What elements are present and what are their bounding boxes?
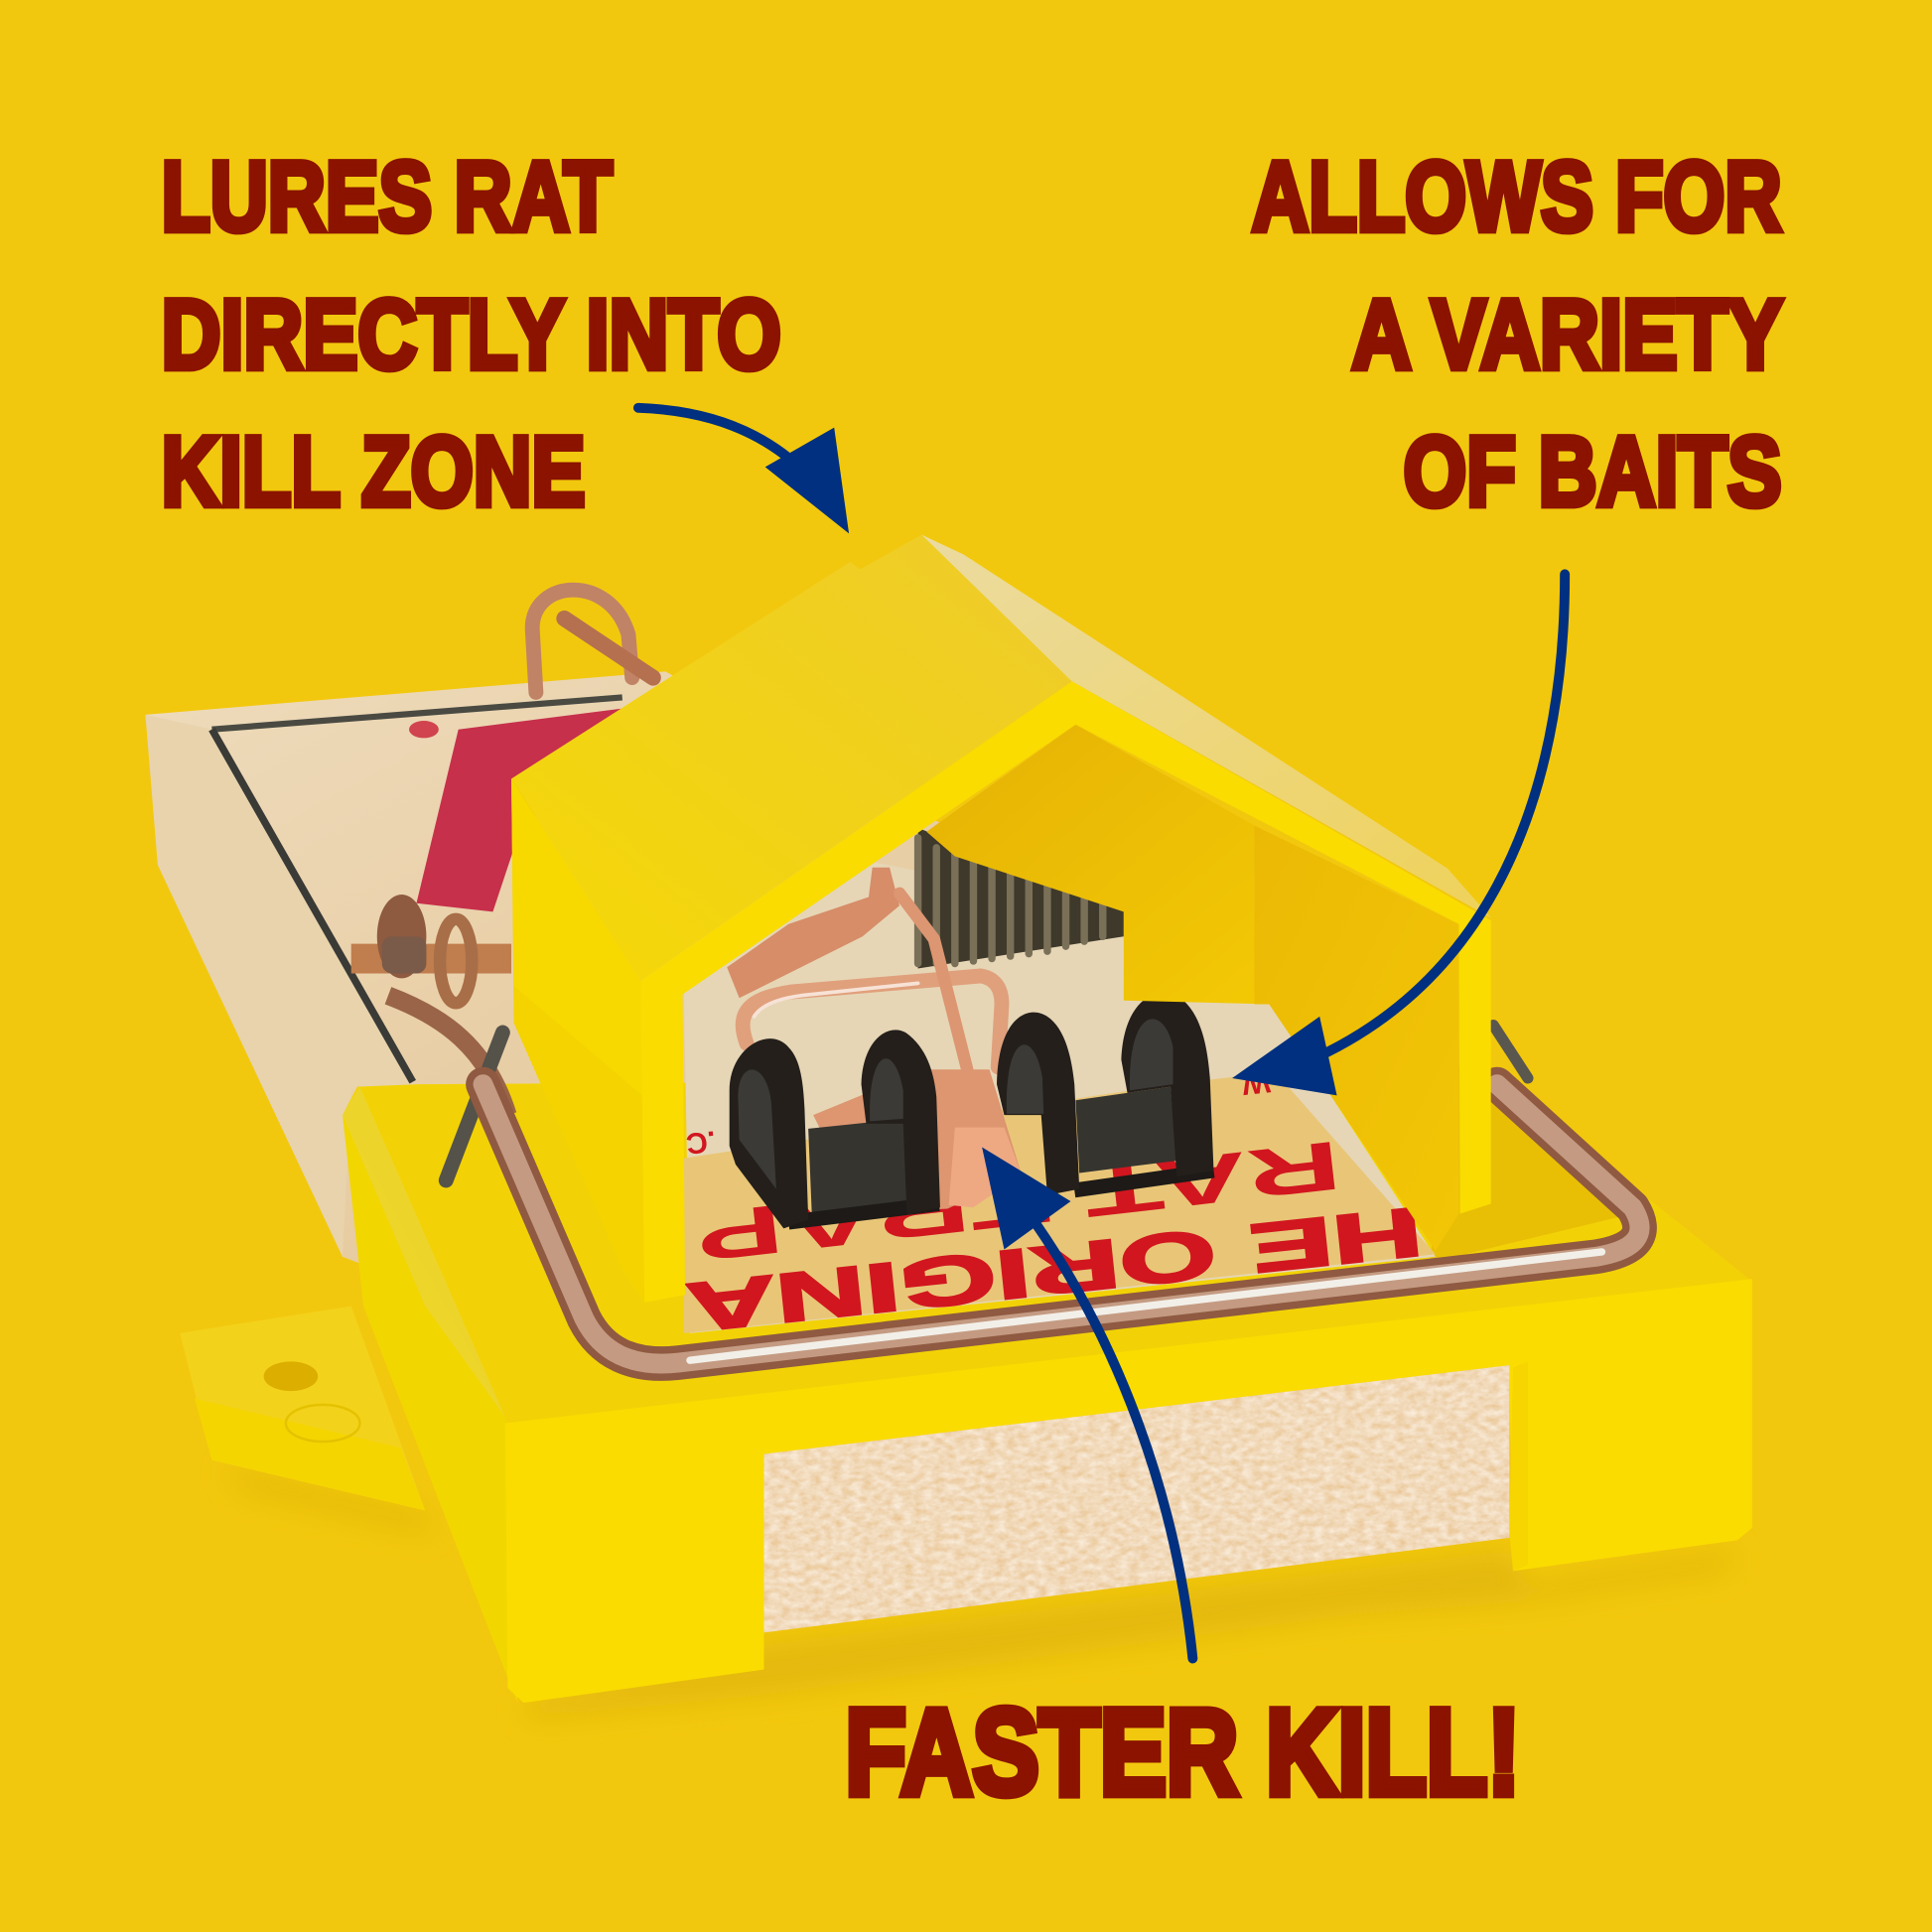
interior walls [926,725,1269,1004]
printed label text [683,1065,1426,1347]
printed label text: RAT TRAP [692,1126,1345,1277]
printed label text: W [1240,1065,1272,1101]
holder arches [730,993,1213,1228]
holder trays [808,1119,918,1217]
arrow: to kill zone entrance [638,408,849,533]
front frame [640,681,1491,1303]
arrow: to trigger [982,1147,1192,1658]
heading: lures rat: DIRECTLY INTO [162,280,781,390]
product: rat trap [145,535,1752,1719]
floor inside enclosure with printed label [683,863,1436,1347]
heading: lures rat [162,142,781,527]
heading: variety of baits: OF BAITS [1404,417,1782,527]
holder openings [738,1019,1173,1189]
yellow house cover [511,535,1491,1303]
wooden trap base [145,671,1269,1282]
back staple [532,590,653,692]
heading: variety of baits: A VARIETY [1351,280,1783,390]
roof right [921,535,1491,918]
printed label text: .C [684,1124,718,1160]
left latch hardware [351,895,1528,1180]
black bait holder [730,993,1213,1228]
copper wire frame [483,1084,1640,1364]
arrow: to bait holder [1232,574,1565,1095]
printed label text: HE ORIGINA [683,1192,1426,1347]
heading: lures rat: KILL ZONE [162,417,586,527]
copper trigger and bail [727,868,1022,1213]
mounting tab [180,1307,425,1511]
side wall [511,778,644,1303]
heading: variety of baits: ALLOWS FOR [1252,142,1782,252]
heading: faster kill: FASTER KILL! [845,1685,1520,1821]
shadow under trap [221,1466,1737,1719]
yellow base enclosure [343,1059,1752,1703]
sawdust bait block [763,1365,1509,1632]
heading: lures rat: LURES RAT [162,142,613,252]
heading: variety of baits [1252,142,1783,527]
coil spring [918,828,1124,968]
roof left [511,535,1072,981]
